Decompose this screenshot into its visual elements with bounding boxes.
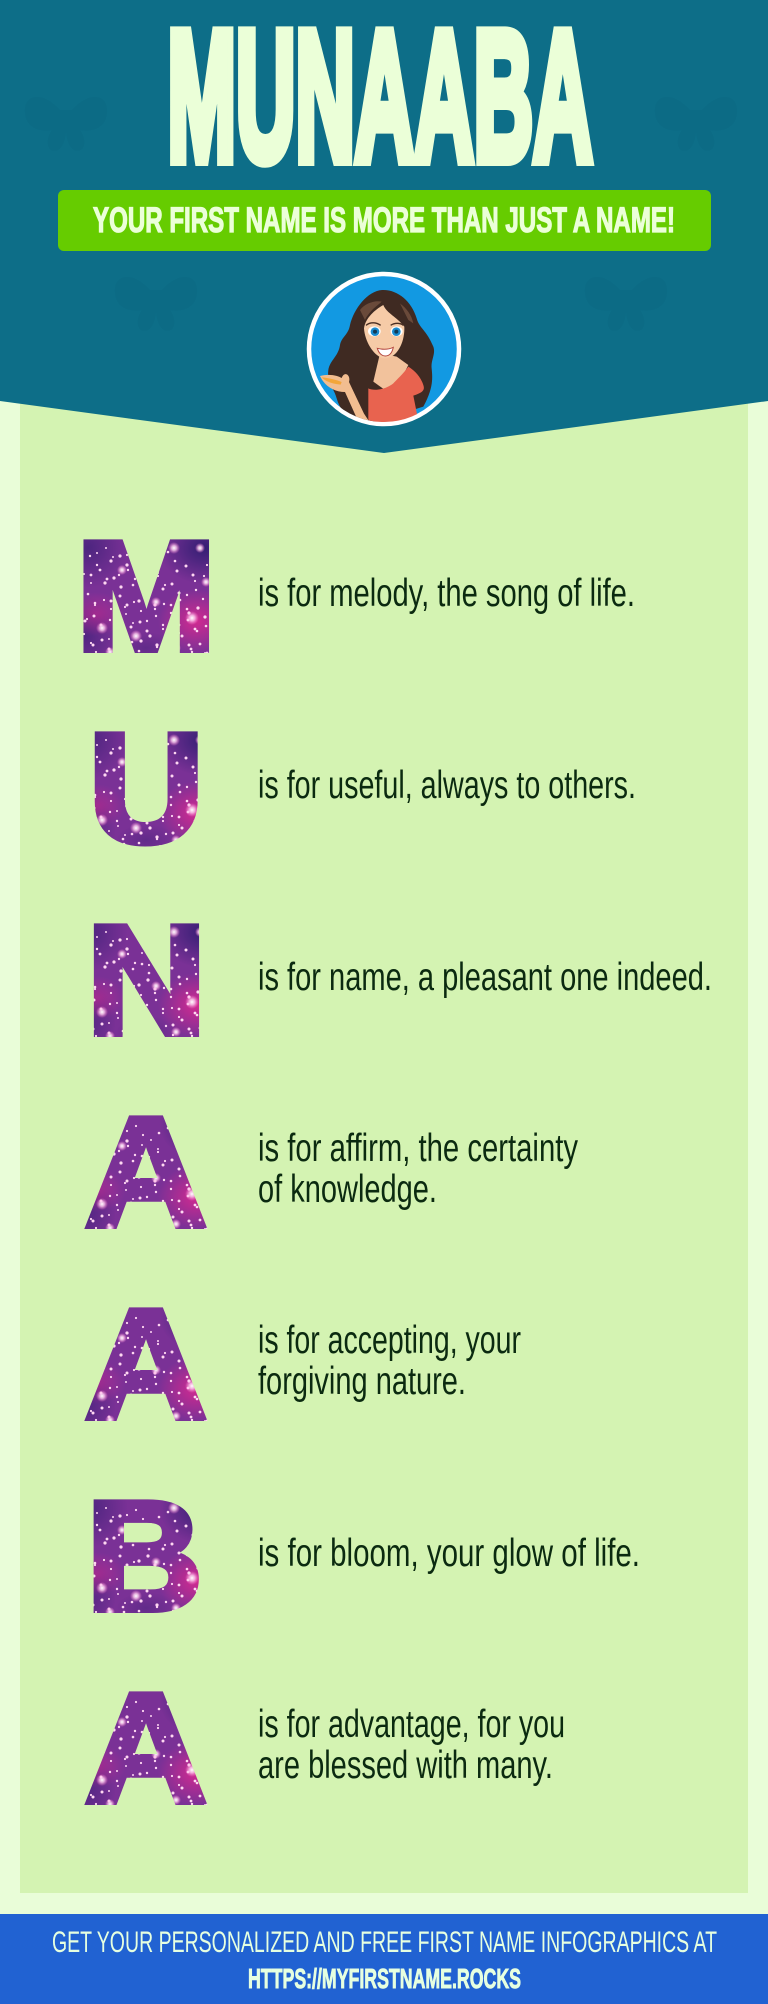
text: affirm: of knowledge. (258, 1168, 437, 1211)
text: affirm (258, 1127, 578, 1211)
text: accepting: is for accepting, your (258, 1319, 521, 1362)
row: N (86, 894, 712, 1066)
letter B: B (86, 1470, 202, 1642)
letter N: N (86, 894, 207, 1066)
letter M: M (76, 510, 216, 682)
footer band (0, 1914, 768, 2004)
header band (0, 0, 768, 453)
text: accepting: forgiving nature. (258, 1360, 466, 1403)
content panel (20, 390, 748, 1893)
text: affirm: is for affirm, the certainty (258, 1127, 578, 1170)
text: advantage: is for advantage, for you (258, 1703, 565, 1746)
row: A accepting (86, 1278, 521, 1450)
icon: woman avatar (309, 274, 459, 439)
row: B (86, 1470, 640, 1642)
text: accepting (258, 1319, 521, 1403)
row: M (76, 510, 635, 682)
letter A: A (86, 1662, 207, 1834)
text: useful: is for useful, always to others. (258, 764, 636, 807)
row: A advantage (86, 1662, 565, 1834)
text: melody: is for melody, the song of life. (258, 572, 635, 615)
text: advantage (258, 1703, 565, 1787)
letter U: U (89, 702, 204, 874)
row: A affirm (86, 1086, 578, 1258)
letter A: A (86, 1278, 207, 1450)
row: U (89, 702, 636, 874)
footer url: HTTPS://MYFIRSTNAME.ROCKS (248, 1963, 521, 1994)
letter A: A (86, 1086, 207, 1258)
text: advantage: are blessed with many. (258, 1744, 553, 1787)
text: bloom: is for bloom, your glow of life. (258, 1532, 640, 1575)
subtitle banner (58, 190, 711, 251)
